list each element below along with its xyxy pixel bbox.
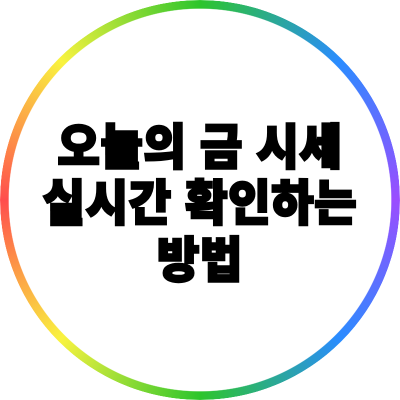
title: 방법 — [157, 232, 243, 287]
title: 오늘의 금 시세 — [57, 119, 343, 174]
title: 실시간 확인하는 — [43, 176, 357, 230]
title — [42, 119, 357, 287]
